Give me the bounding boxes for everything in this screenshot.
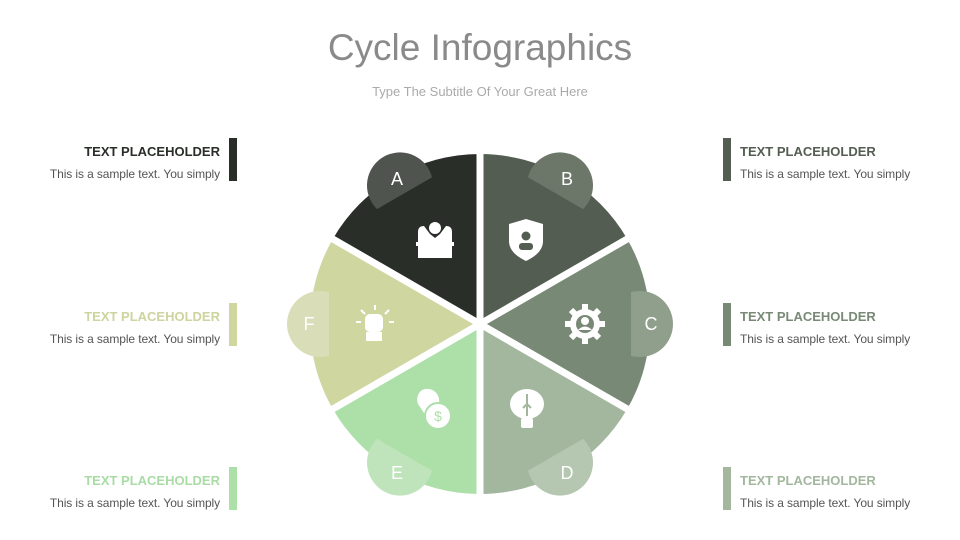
icon C: gear bbox=[565, 304, 605, 344]
badge A bbox=[367, 152, 432, 209]
text block: D: TEXT PLACEHOLDER bbox=[740, 473, 876, 488]
segment C bbox=[480, 239, 650, 409]
badge F bbox=[287, 291, 329, 357]
badge D bbox=[528, 439, 593, 496]
text block: B bbox=[723, 138, 910, 181]
text block: F: TEXT PLACEHOLDER bbox=[84, 309, 220, 324]
letters bbox=[304, 169, 658, 483]
text block: E: This is a sample text. You simply bbox=[50, 496, 220, 510]
badge B bbox=[528, 152, 593, 209]
icon B: shield user bbox=[509, 219, 543, 261]
title: Cycle Infographics bbox=[328, 27, 632, 68]
text block: F bbox=[50, 303, 237, 346]
text block: B: TEXT PLACEHOLDER bbox=[740, 144, 876, 159]
subtitle: Type The Subtitle Of Your Great Here bbox=[372, 84, 588, 99]
segment D bbox=[480, 324, 627, 494]
text block: B: This is a sample text. You simply bbox=[740, 167, 910, 181]
icon A: podium bbox=[416, 222, 454, 258]
letters: C bbox=[644, 314, 658, 334]
segment E bbox=[333, 324, 480, 494]
text block: E: TEXT PLACEHOLDER bbox=[84, 473, 220, 488]
cycle diagram bbox=[287, 152, 673, 496]
letters: D bbox=[560, 463, 574, 483]
text block: A bbox=[50, 138, 237, 181]
badge C bbox=[631, 291, 673, 357]
letters: B bbox=[561, 169, 573, 189]
letters: E bbox=[391, 463, 403, 483]
badge E bbox=[367, 439, 432, 496]
icon E: location money bbox=[417, 389, 451, 429]
text block: C: TEXT PLACEHOLDER bbox=[740, 309, 876, 324]
letters: A bbox=[391, 169, 403, 189]
segment B bbox=[480, 154, 627, 324]
icon D: brain bulb bbox=[510, 389, 544, 428]
letters: F bbox=[304, 314, 314, 334]
icon F: hand idea bbox=[356, 305, 394, 341]
text block: A: This is a sample text. You simply bbox=[50, 167, 220, 181]
segment A bbox=[333, 154, 480, 324]
text block: F: This is a sample text. You simply bbox=[50, 332, 220, 346]
text block: C: This is a sample text. You simply bbox=[740, 332, 910, 346]
icon E: location money: $ bbox=[434, 408, 442, 424]
segment F bbox=[310, 239, 480, 409]
text block: D: This is a sample text. You simply bbox=[740, 496, 910, 510]
text block: A: TEXT PLACEHOLDER bbox=[84, 144, 220, 159]
text block: C bbox=[723, 303, 910, 346]
text block: D bbox=[723, 467, 910, 510]
text block: E bbox=[50, 467, 237, 510]
